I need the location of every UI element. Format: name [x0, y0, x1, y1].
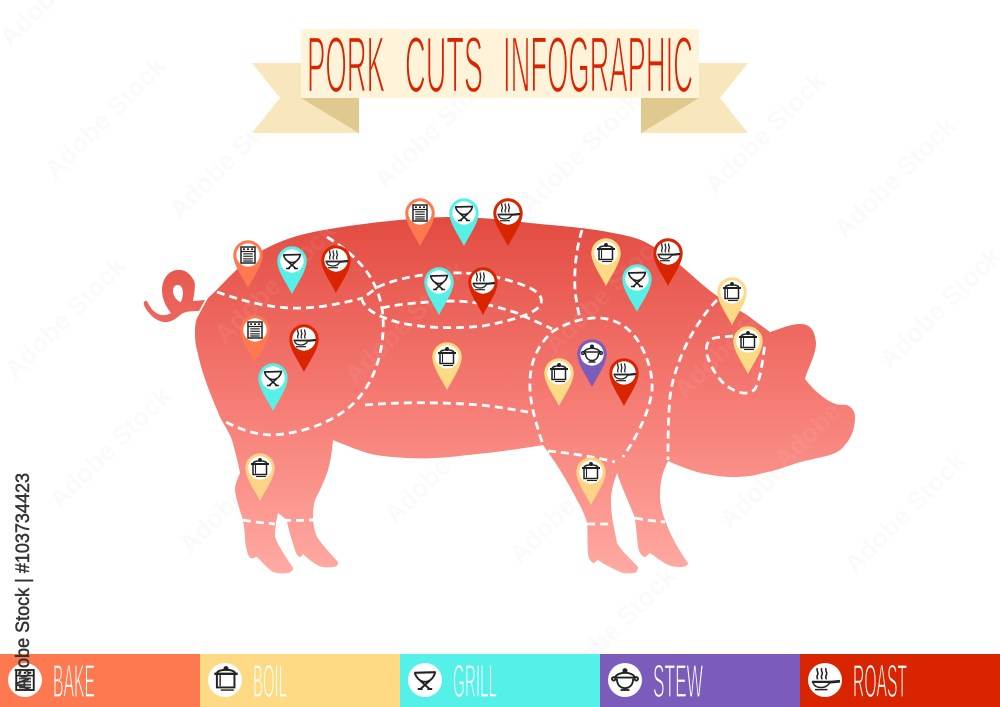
legend: grill — [400, 654, 600, 707]
pin: roast loin — [468, 267, 498, 315]
legend: bake — [0, 654, 200, 707]
faint watermarks on pig: Adobe Stock — [208, 215, 342, 349]
pin: roast shoulder — [653, 238, 683, 286]
pig body — [195, 217, 855, 573]
pin: grill shoulder — [622, 264, 652, 312]
pin: grill loin — [424, 267, 454, 315]
pin: boil neck — [717, 277, 747, 325]
faint diagonal watermarks on background: Adobe Stock — [378, 395, 512, 529]
faint diagonal watermarks on background: Adobe Stock — [713, 400, 847, 534]
title banner — [252, 20, 748, 133]
pin: stew picnic — [577, 339, 607, 387]
legend: stew: STEW — [653, 655, 703, 707]
faint diagonal watermarks on background: Adobe Stock — [548, 560, 682, 694]
pin: roast ham — [289, 324, 319, 372]
title — [307, 20, 693, 109]
pig tail — [144, 270, 205, 322]
faint watermarks on pig: Adobe — [768, 396, 846, 474]
pin: boil hind hock — [245, 453, 275, 501]
pin: boil belly — [432, 342, 462, 390]
dashed cut lines — [217, 230, 765, 524]
faint watermarks on pig: Adobe Stock — [668, 270, 802, 404]
pin: roast picnic — [609, 358, 639, 406]
faint diagonal watermarks on background: Adobe — [173, 481, 251, 559]
pin: grill ham — [258, 363, 288, 411]
faint diagonal watermarks on background: Adobe Stock — [38, 50, 172, 184]
pin: grill rump — [277, 246, 307, 294]
pin: bake rump — [233, 240, 263, 288]
faint diagonal watermarks on background: Adobe Stock — [698, 65, 832, 199]
pig silhouette — [144, 217, 855, 573]
pin: boil jowl — [733, 326, 763, 374]
legend: stew — [600, 654, 800, 707]
faint diagonal watermarks on background: Adobe Stock — [503, 435, 637, 569]
legend: bake: BAKE — [53, 655, 95, 707]
faint diagonal watermarks on background: Adobe Stock — [828, 110, 962, 244]
legend: grill: GRILL — [453, 655, 497, 707]
legend: boil — [200, 654, 400, 707]
pin: boil picnic — [544, 358, 574, 406]
legend bar — [0, 654, 1000, 707]
faint watermarks on pig: Adobe Stock — [338, 255, 472, 389]
title: CUTS — [405, 20, 483, 109]
faint watermarks on pig: Adobe Stock — [538, 225, 672, 359]
faint diagonal watermarks on background: Adobe Stock — [163, 90, 297, 224]
pin: roast rump — [321, 245, 351, 293]
faint diagonal watermarks on background: Adobe Stock — [368, 60, 502, 194]
faint watermarks on pig — [208, 215, 846, 474]
faint diagonal watermarks on background: Adobe Stock — [0, 250, 132, 384]
pin: grill top — [449, 198, 479, 246]
faint diagonal watermarks on background: Adobe Stock — [43, 380, 177, 514]
pin: roast top — [493, 198, 523, 246]
pin: boil front hock — [576, 457, 606, 505]
faint diagonal watermarks on background: Adobe Stock — [838, 445, 972, 579]
title: PORK — [307, 20, 385, 109]
faint diagonal watermarks on background: Adobe Stock — [513, 85, 647, 219]
pin: bake ham — [240, 315, 270, 363]
pin: bake top — [405, 198, 435, 246]
vertical stock id: Adobe Stock | #103734423 — [13, 473, 34, 690]
legend: boil: BOIL — [253, 655, 287, 707]
pin: boil shoulder — [591, 238, 621, 286]
